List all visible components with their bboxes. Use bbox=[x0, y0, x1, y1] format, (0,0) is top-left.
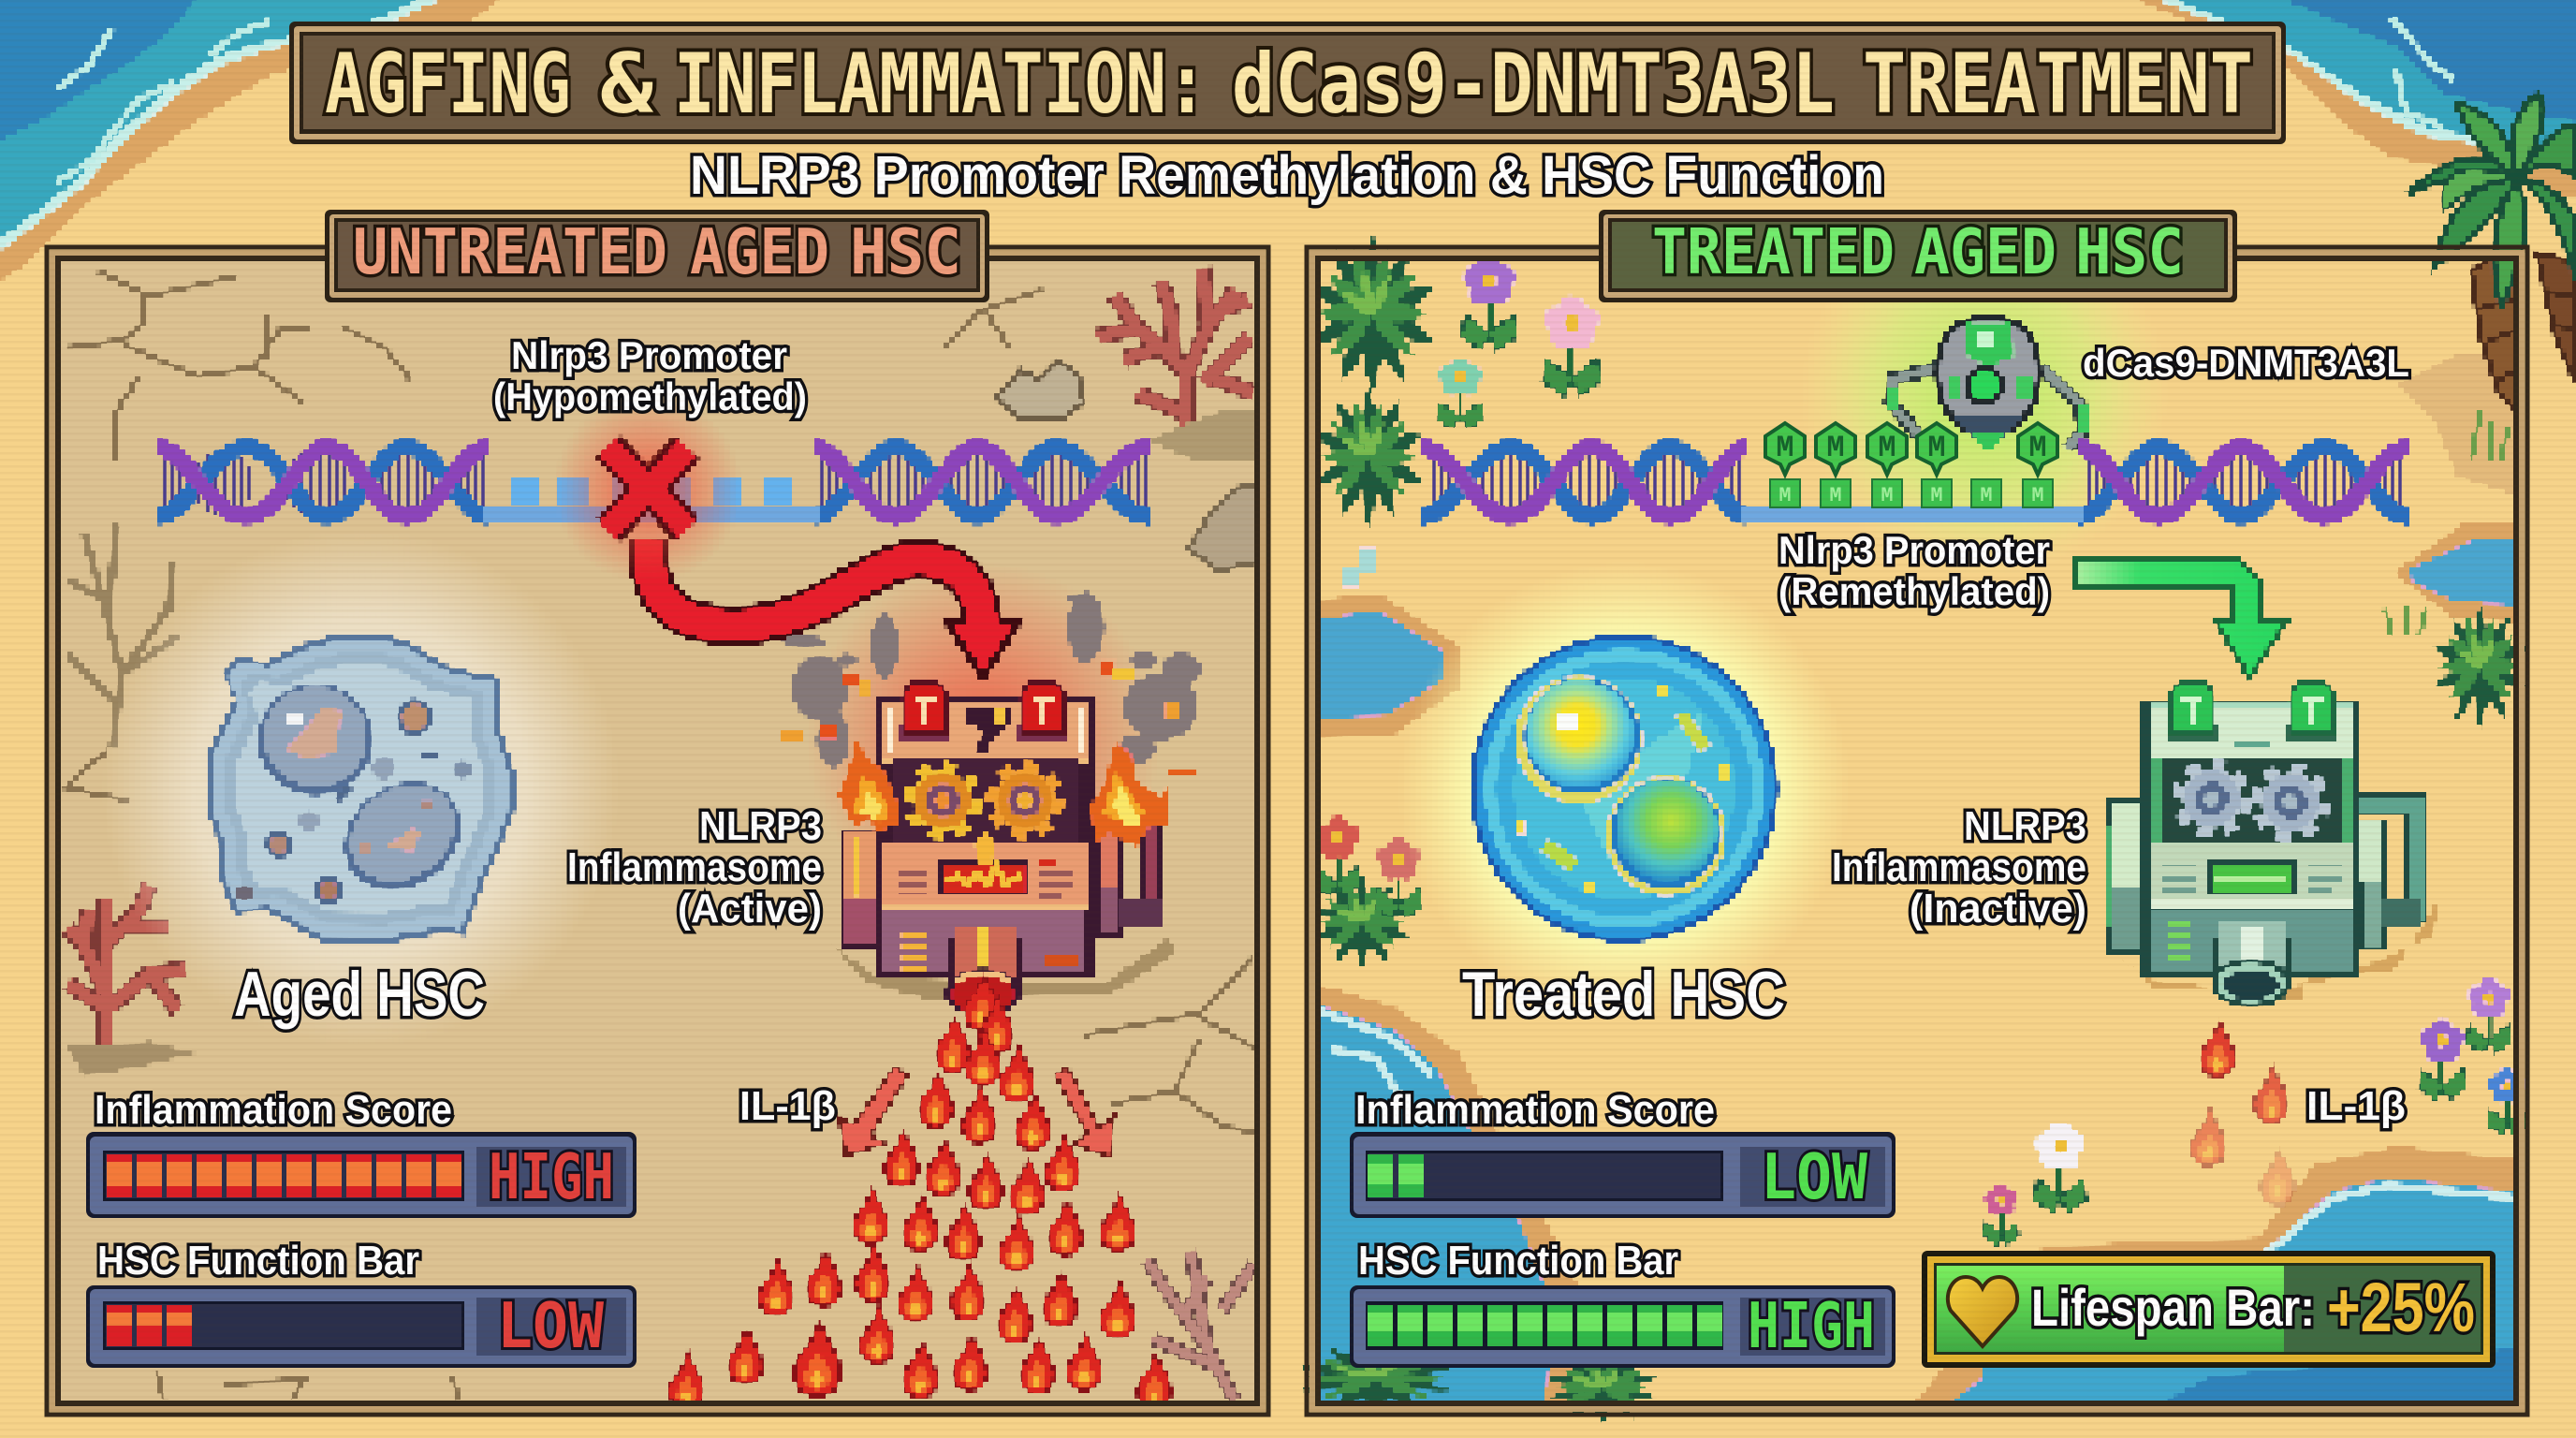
coral lower left bbox=[66, 885, 197, 1077]
treated nucleus lower bbox=[1606, 776, 1726, 896]
left panel frame bbox=[47, 247, 1268, 1415]
dCas9-DNMT3A3L robot bbox=[1885, 315, 2089, 451]
halo around treated cell bbox=[1399, 564, 1849, 1013]
methylated bases: M bbox=[1881, 484, 1894, 507]
lifespan value: +25% bbox=[2327, 1269, 2475, 1346]
right DNA rungs bbox=[1434, 449, 2400, 517]
methyl tags: M bbox=[1776, 431, 1794, 465]
lifespan bar bbox=[1922, 1251, 2496, 1368]
methylated bases: M bbox=[1829, 484, 1842, 507]
left heading text: AGED bbox=[690, 215, 829, 288]
label: IL-1 beta right: IL-1β bbox=[2306, 1083, 2406, 1129]
label: NLRP3 inflammasome inactive: Inflammasome bbox=[1832, 844, 2086, 890]
bases bbox=[509, 477, 790, 507]
idle outlet bbox=[2211, 922, 2291, 1008]
coral bottom right bbox=[1147, 1250, 1254, 1401]
nucleus upper bbox=[257, 683, 373, 796]
left tank bbox=[2106, 796, 2147, 953]
label: NLRP3 inflammasome active: (Active) bbox=[678, 886, 822, 932]
label: dCas9-DNMT3A3L: dCas9-DNMT3A3L bbox=[2083, 341, 2409, 385]
warning lights bbox=[900, 682, 1069, 741]
title banner bbox=[289, 22, 2286, 144]
right inflammation score bbox=[1350, 1087, 1895, 1218]
DNA rungs bbox=[165, 449, 1146, 517]
dead tree bbox=[67, 524, 178, 749]
right pond bbox=[2393, 522, 2519, 623]
lower-left shoreline water bbox=[1315, 983, 1591, 1408]
label: NLRP3 inflammasome inactive: (Inactive) bbox=[1910, 886, 2086, 932]
label: Nlrp3 promoter hypomethylated: Nlrp3 Promoter bbox=[511, 333, 787, 377]
function label: HSC Function Bar bbox=[97, 1238, 419, 1284]
dCas9 glow bbox=[1802, 211, 2167, 576]
active gears bbox=[909, 767, 1059, 834]
nucleus lower bbox=[323, 759, 482, 913]
title text bbox=[325, 36, 2253, 132]
label: NLRP3 inflammasome inactive: NLRP3 bbox=[1964, 803, 2086, 849]
left inflammation score bbox=[86, 1087, 637, 1218]
promoter backbone bbox=[482, 508, 819, 521]
methyl tags: M bbox=[1927, 431, 1946, 465]
label: NLRP3 inflammasome active: Inflammasome bbox=[567, 844, 822, 890]
right inflammation bar low bbox=[1350, 1132, 1895, 1218]
right inflammation label: Inflammation Score bbox=[1355, 1087, 1715, 1133]
left heading text: HSC bbox=[850, 215, 961, 288]
smoke clouds bbox=[783, 592, 1202, 768]
red pathway arrow bbox=[649, 539, 1018, 678]
right function bar high bbox=[1350, 1285, 1895, 1368]
lower-right shoreline water bbox=[1910, 1146, 2519, 1408]
IL-1 beta flames stream bbox=[669, 975, 1171, 1409]
right heading text: AGED bbox=[1914, 215, 2056, 288]
right purple strand bbox=[1423, 448, 2408, 517]
title text: AGFING bbox=[325, 36, 571, 132]
left panel IL-1 beta arrows bbox=[839, 1067, 1114, 1157]
strands and red X, pixelated bbox=[157, 395, 1149, 582]
right pipe bbox=[2361, 805, 2421, 948]
left heading text: UNTREATED bbox=[353, 215, 667, 288]
palm tree top right bbox=[2408, 94, 2576, 417]
right blue strand bbox=[1423, 448, 2408, 517]
active monitor bbox=[940, 858, 1030, 896]
methyl tags: M bbox=[2028, 431, 2047, 465]
NLRP3 inflammasome machine (inactive) bbox=[2106, 682, 2438, 1008]
title text: & bbox=[600, 36, 654, 132]
right pipe bbox=[1097, 824, 1162, 934]
beach and ocean top-left bbox=[0, 0, 501, 281]
right promoter backbone bbox=[1741, 508, 2084, 521]
idle monitor bbox=[2206, 859, 2297, 896]
methyl tags: M bbox=[1878, 431, 1896, 465]
right heading text: HSC bbox=[2075, 215, 2184, 288]
right panel heading banner bbox=[1599, 210, 2237, 302]
methylated bases: M bbox=[1778, 484, 1792, 507]
title text: TREATMENT bbox=[1863, 36, 2253, 132]
lifespan text: Lifespan Bar: bbox=[2031, 1278, 2315, 1337]
label: IL-1 beta left: IL-1β bbox=[739, 1083, 836, 1129]
aged HSC cell bbox=[206, 635, 515, 944]
ground cracks bbox=[66, 271, 1257, 1401]
outlet nozzle bbox=[944, 927, 1023, 1019]
left heading text bbox=[353, 215, 961, 288]
label: Nlrp3 promoter remethylated: (Remethylated) bbox=[1778, 569, 2050, 613]
rocks bbox=[996, 360, 1259, 571]
halo around aged cell bbox=[103, 531, 618, 1046]
treated nucleus upper bbox=[1515, 676, 1643, 803]
red X mark bbox=[608, 448, 687, 530]
inflammation label: Inflammation Score bbox=[95, 1087, 452, 1133]
palm shadow on sand bbox=[2396, 353, 2519, 496]
inflammation bar high: HIGH bbox=[489, 1140, 614, 1213]
DNA strand right panel bbox=[1423, 423, 2408, 521]
methylated bases: M bbox=[1930, 484, 1943, 507]
right heading text bbox=[1652, 215, 2184, 288]
heart icon bbox=[1948, 1277, 2017, 1346]
coral top right bbox=[1097, 267, 1259, 459]
gear window bbox=[2149, 756, 2353, 843]
label: Nlrp3 promoter hypomethylated: (Hypomethylated) bbox=[493, 374, 807, 418]
label: NLRP3 inflammasome active bbox=[567, 803, 822, 932]
right inflammation bar low: LOW bbox=[1761, 1140, 1868, 1213]
methylated bases: M bbox=[2031, 484, 2044, 507]
label: NLRP3 inflammasome inactive bbox=[1832, 803, 2086, 932]
right function bar high: HIGH bbox=[1748, 1289, 1875, 1362]
right panel ground bbox=[1315, 257, 2519, 1408]
red X glow bbox=[554, 395, 741, 582]
title text: INFLAMMATION: bbox=[674, 36, 1208, 132]
right function label: HSC Function Bar bbox=[1358, 1238, 1678, 1284]
green pathway arrow bbox=[2076, 561, 2286, 678]
function bar low bbox=[86, 1285, 637, 1368]
title text: dCas9-DNMT3A3L bbox=[1232, 36, 1835, 132]
treated HSC cell bbox=[1470, 634, 1778, 943]
inflammation bar high bbox=[86, 1132, 637, 1218]
label: Nlrp3 promoter remethylated: Nlrp3 Promoter bbox=[1778, 528, 2050, 572]
methyl tags bbox=[1765, 423, 2057, 475]
right-side inflammasome IL-1 beta flames fading bbox=[2191, 1020, 2294, 1205]
right panel frame bbox=[1307, 247, 2527, 1415]
plants and flowers right panel bbox=[1296, 233, 2529, 1425]
NLRP3 inflammasome machine (active) bbox=[782, 660, 1196, 1019]
gear window bbox=[891, 760, 1076, 843]
right strands, pixelated bbox=[1423, 448, 2408, 521]
label: Treated HSC: Treated HSC bbox=[1462, 959, 1785, 1030]
idle gears bbox=[2178, 765, 2324, 836]
right heading text: TREATED bbox=[1652, 215, 1895, 288]
purple strand bbox=[157, 448, 1149, 517]
label: Nlrp3 promoter remethylated bbox=[1778, 528, 2050, 613]
flames on machine bbox=[782, 660, 1196, 866]
left panel ground bbox=[56, 257, 1264, 1408]
label: Aged HSC: Aged HSC bbox=[234, 959, 485, 1030]
upper-left pond bbox=[1315, 594, 1460, 740]
right HSC function bbox=[1350, 1238, 1895, 1368]
label: NLRP3 inflammasome active: NLRP3 bbox=[699, 803, 822, 849]
methylated bases bbox=[1770, 479, 2053, 507]
blue strand bbox=[157, 448, 1149, 517]
label: Nlrp3 promoter hypomethylated bbox=[493, 333, 807, 418]
subtitle: NLRP3 Promoter Remethylation & HSC Function bbox=[690, 145, 1884, 206]
beach and ocean top-right bbox=[2134, 0, 2576, 198]
DNA strand left panel bbox=[157, 395, 1149, 582]
active machine glow bbox=[805, 562, 1161, 917]
function bar low: LOW bbox=[497, 1289, 605, 1362]
left HSC function bbox=[86, 1238, 637, 1368]
methylated bases: M bbox=[1980, 484, 1993, 507]
methyl tags: M bbox=[1826, 431, 1845, 465]
left panel heading banner bbox=[325, 210, 989, 302]
status lights bbox=[2166, 682, 2338, 741]
left tank bbox=[840, 829, 881, 950]
